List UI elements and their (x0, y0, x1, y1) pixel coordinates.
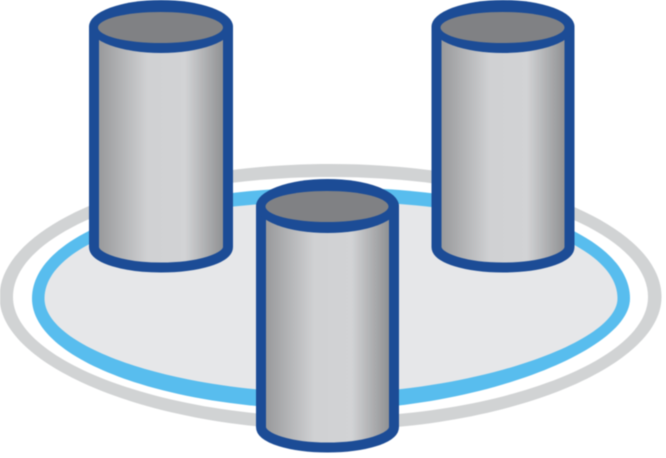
cylinder: back left (89, 0, 233, 268)
cylinder: back right (432, 0, 574, 267)
outer grey ring (0, 164, 662, 430)
blue ring with light platform (32, 188, 630, 410)
cylinder: front centre (256, 179, 399, 447)
